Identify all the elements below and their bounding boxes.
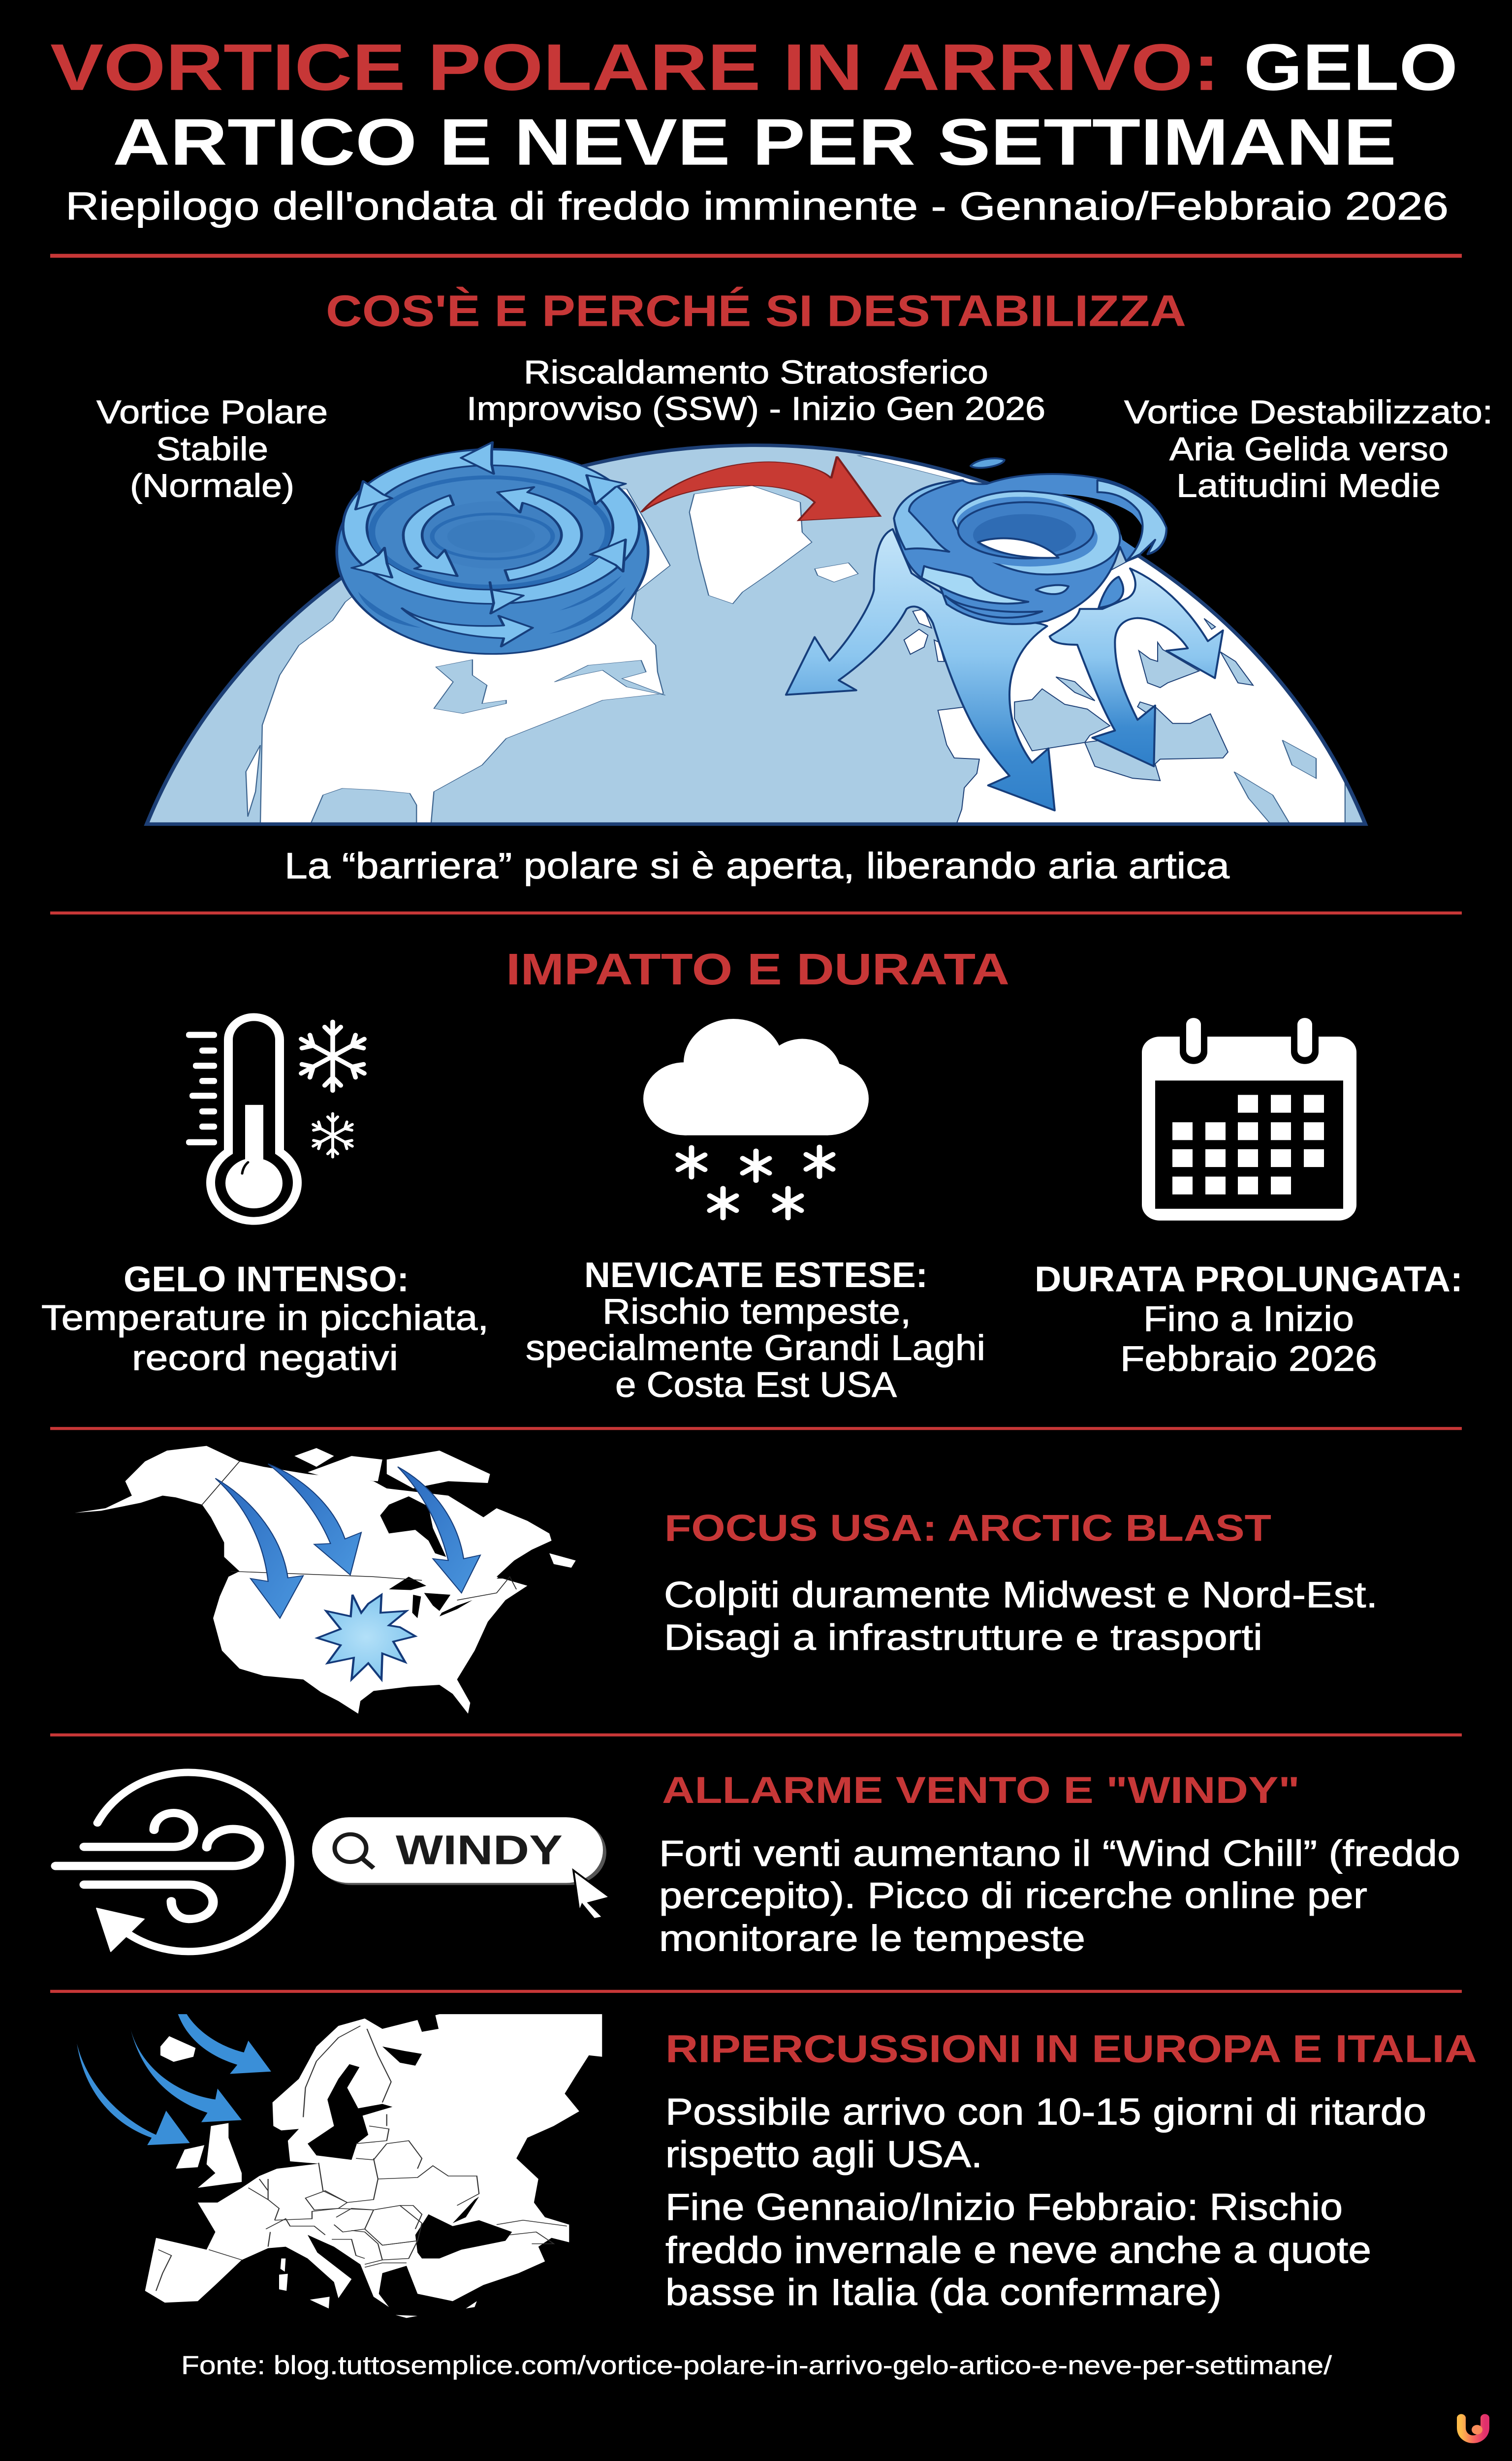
heading: cos'è: COS'È E PERCHÉ SI DESTABILIZZA — [326, 286, 1186, 336]
globe dome — [147, 445, 1365, 824]
arrow: south-east and east drip — [1050, 568, 1223, 766]
text: ripercussioni body 2 — [665, 2186, 1371, 2313]
text: allarme body: monitorare le tempeste — [659, 1918, 1085, 1958]
heading: allarme vento: ALLARME VENTO E "WINDY" — [662, 1770, 1300, 1811]
swirl body — [894, 474, 1166, 624]
icon: cold burst — [317, 1595, 415, 1679]
label: riscaldamento stratosferico — [467, 354, 1045, 427]
icon: calendar — [1142, 1018, 1356, 1221]
panel: focus usa — [75, 1446, 1378, 1714]
text: nevicate estese: NEVICATE ESTESE: — [584, 1255, 928, 1295]
continents — [246, 454, 1388, 830]
icon: cursor — [573, 1870, 610, 1919]
map: north america — [75, 1446, 576, 1714]
title line 1 red: VORTICE POLARE IN ARRIVO: — [50, 31, 1220, 104]
label: riscaldamento stratosferico: Riscaldamento Stratosferico — [524, 354, 988, 391]
text: durata prolungata: Fino a Inizio — [1143, 1299, 1354, 1339]
text: allarme body: percepito). Picco di ricerche online per — [659, 1875, 1367, 1916]
seas — [308, 2014, 512, 2305]
icon: destabilized vortex — [786, 458, 1223, 811]
label: vortice polare stabile: Vortice Polare — [96, 394, 328, 431]
label: riscaldamento stratosferico: Improvviso (SSW) - Inizio Gen 2026 — [467, 390, 1045, 427]
icon: thermometer with snowflakes — [186, 1017, 368, 1221]
text: nevicate estese: e Costa Est USA — [615, 1365, 897, 1405]
panel: allarme vento — [56, 1770, 1460, 1958]
globe illustration — [147, 442, 1388, 830]
land — [75, 1446, 552, 1714]
text: ripercussioni body 1 — [665, 2091, 1426, 2176]
text: gelo intenso: record negativi — [132, 1338, 398, 1378]
text: focus usa body: Colpiti duramente Midwest e Nord-Est. — [664, 1574, 1378, 1615]
search pill: windy — [312, 1817, 606, 1885]
borders — [202, 1461, 516, 1600]
icon: snow cloud — [643, 1019, 869, 1218]
panel: europa e italia — [77, 2014, 1477, 2318]
panel: cos'è e perché si destabilizza — [96, 286, 1493, 886]
subtitle: Riepilogo dell'ondata di freddo imminente - Gennaio/Febbraio 2026 — [65, 184, 1449, 228]
label: vortice destabilizzato: Vortice Destabilizzato: — [1124, 394, 1493, 431]
heading: focus usa: FOCUS USA: ARCTIC BLAST — [664, 1508, 1271, 1549]
icon: stable polar vortex — [337, 442, 648, 654]
arrows: air flow to europe — [77, 2014, 271, 2145]
land — [145, 2014, 602, 2307]
text: focus usa body: Disagi a infrastrutture e trasporti — [664, 1617, 1262, 1658]
label: vortice polare stabile — [96, 394, 328, 504]
text: gelo intenso: GELO INTENSO: — [124, 1260, 409, 1299]
arrow: red warming arrow — [641, 456, 881, 521]
text: ripercussioni body 1: Possibile arrivo con 10-15 giorni di ritardo — [665, 2091, 1426, 2133]
text: nevicate estese — [526, 1255, 985, 1405]
text: allarme body — [659, 1833, 1460, 1958]
text: durata prolungata: Febbraio 2026 — [1120, 1339, 1377, 1379]
text: ripercussioni body 1: rispetto agli USA. — [665, 2134, 982, 2176]
icon: logo — [1461, 2418, 1485, 2439]
text: nevicate estese: Rischio tempeste, — [602, 1292, 911, 1331]
arrows: arctic air — [216, 1464, 480, 1618]
label: vortice destabilizzato: Aria Gelida verso — [1169, 431, 1449, 468]
title — [50, 31, 1458, 179]
text: gelo intenso — [41, 1260, 489, 1378]
label: vortice destabilizzato: Latitudini Medie — [1176, 467, 1441, 504]
map: europe — [77, 2014, 602, 2318]
icon: wind — [56, 1772, 290, 1952]
heading: ripercussioni: RIPERCUSSIONI IN EUROPA E ITALIA — [665, 2027, 1477, 2070]
swirl ring — [953, 491, 1120, 574]
label: vortice destabilizzato — [1124, 394, 1493, 504]
title line 2: ARTICO E NEVE PER SETTIMANE — [113, 105, 1396, 179]
text: durata prolungata: DURATA PROLUNGATA: — [1035, 1260, 1463, 1299]
heading: impatto: IMPATTO E DURATA — [506, 945, 1009, 994]
arrow: west and south drip — [786, 529, 1055, 811]
label: vortice polare stabile: Stabile — [156, 431, 268, 468]
text: ripercussioni body 2: basse in Italia (da confermare) — [665, 2272, 1222, 2313]
text: allarme body: Forti venti aumentano il “Wind Chill” (freddo — [659, 1833, 1460, 1874]
label: vortice polare stabile: (Normale) — [130, 467, 294, 504]
panel: impatto e durata — [41, 945, 1463, 1405]
text: focus usa body — [664, 1574, 1378, 1658]
search pill: windy: WINDY — [396, 1827, 563, 1873]
text: ripercussioni body 2: Fine Gennaio/Inizio Febbraio: Rischio — [665, 2186, 1343, 2228]
lakes and bays — [380, 1496, 549, 1618]
borders — [156, 2026, 567, 2291]
text: ripercussioni body 2: freddo invernale e neve anche a quote — [665, 2230, 1371, 2271]
title line 1 white: GELO — [1244, 31, 1458, 104]
text: durata prolungata — [1035, 1260, 1463, 1379]
caption: barriera: La “barriera” polare si è aperta, liberando aria artica — [284, 845, 1230, 886]
source line: Fonte: blog.tuttosemplice.com/vortice-polare-in-arrivo-gelo-artico-e-neve-per-settimane/ — [181, 2351, 1332, 2380]
text: gelo intenso: Temperature in picchiata, — [41, 1298, 489, 1338]
text: nevicate estese: specialmente Grandi Laghi — [526, 1328, 985, 1368]
